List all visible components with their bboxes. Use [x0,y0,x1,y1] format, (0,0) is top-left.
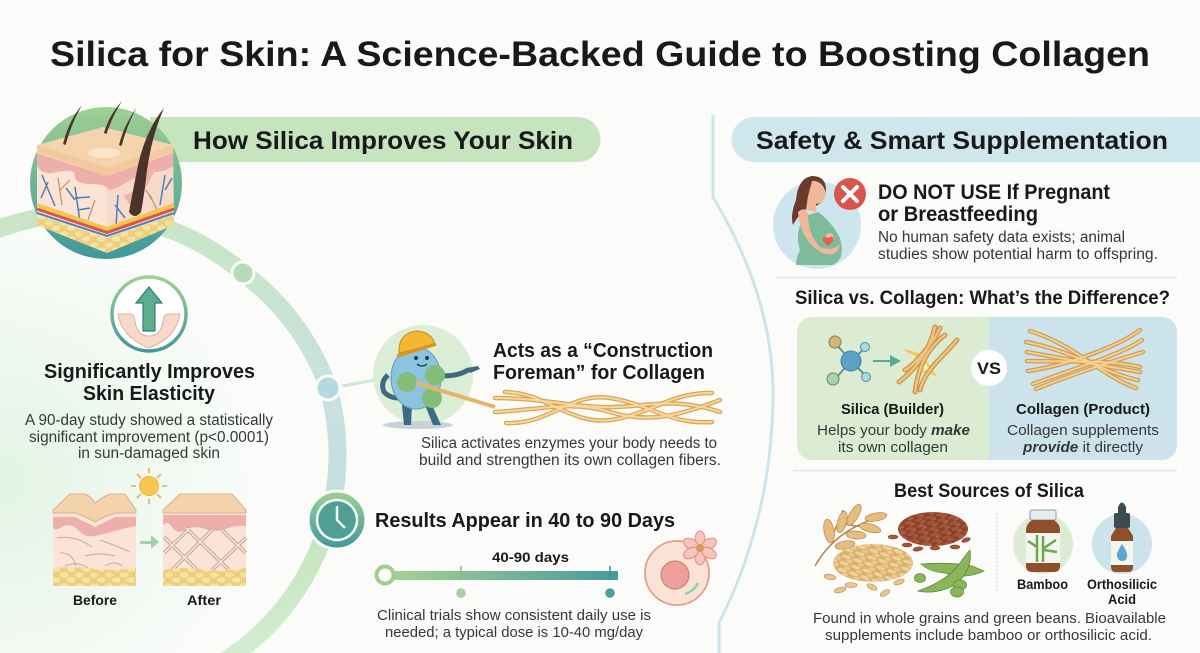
connector: node to foreman [342,380,375,386]
text: elasticity study: significant improvement (p<0.0001) [29,429,269,446]
illustration: before skin [53,494,136,586]
icon: pregnant woman warning [773,176,866,269]
heading: results timing: Results Appear in 40 to 90 Days [375,510,675,532]
text: pregnancy warning: No human safety data exists; animal [878,229,1125,246]
icon: collagen fibers [1026,330,1143,389]
text: pregnancy warning: studies show potential harm to offspring. [878,246,1158,263]
icon: clock [308,491,366,549]
timeline chart [376,549,618,598]
text: silica builder: its own collagen [838,439,948,456]
text: pregnancy warning [878,229,1158,263]
text: foreman description [419,435,721,469]
illustration: whole grains and beans [815,502,984,598]
text: collagen product [1007,401,1159,456]
illustration: after skin [163,494,246,586]
label: orthosilicic acid: Orthosilicic [1087,577,1157,592]
icon: red rice pile [888,512,971,552]
text: sources summary: supplements include bamboo or orthosilicic acid. [825,627,1152,644]
section ring arc [0,214,337,653]
heading: do not use [878,181,1110,226]
title: Silica for Skin: A Science-Backed Guide to Boosting Collagen [50,35,1150,74]
text: dosing: needed; a typical dose is 10-40 mg/day [385,624,643,641]
heading: silica vs collagen: Silica vs. Collagen: What’s the Difference? [795,287,1170,309]
label: after: After [187,592,222,608]
icon: skin cross-section [30,101,182,259]
icon: green beans [914,550,984,597]
icon: collagen being built [899,327,957,392]
icon: light rice pile [824,544,913,598]
badge: vs: VS [977,359,1001,378]
heading: do not use: or Breastfeeding [878,203,1038,226]
heading: skin elasticity: Significantly Improves [44,361,255,383]
arrow: silica to collagen [873,355,901,367]
arrow: before to after [140,535,159,549]
text: collagen product: Collagen (Product) [1016,401,1150,418]
text: silica builder: Helps your body make [817,422,970,439]
section heading: how silica improves your skin [150,117,601,162]
section heading: safety [732,117,1200,162]
text: elasticity study [25,412,273,462]
text: foreman description: Silica activates enzymes your body needs to [421,435,717,452]
text: collagen product: provide it directly [1022,439,1143,456]
text: silica builder [817,401,970,456]
text: silica builder: Silica (Builder) [841,401,944,418]
text: dosing [377,607,651,641]
node: ring dot upper [232,262,254,284]
label: before: Before [73,592,117,608]
badge: vs [971,350,1007,386]
section heading: how silica improves your skin: How Silica Improves Your Skin [193,127,573,155]
heading: construction foreman [493,340,713,384]
heading: construction foreman: Acts as a “Construction [493,340,713,362]
heading: best sources: Best Sources of Silica [894,481,1084,502]
text: elasticity study: A 90-day study showed a statistically [25,412,273,429]
dotted separator [996,513,998,592]
text: elasticity study: in sun-damaged skin [78,445,220,462]
heading: construction foreman: Foreman” for Collagen [493,362,705,384]
heading: skin elasticity: Skin Elasticity [83,383,216,405]
icon: elasticity arrow [112,277,186,351]
icon: wheat stalk [815,502,888,566]
timeline chart: 40-90 days [492,549,569,565]
label: bamboo: Bamboo [1017,577,1068,592]
icon: sun [131,468,167,504]
panel divider curve [713,115,773,653]
panel: comparison [797,317,1177,460]
heading: do not use: DO NOT USE If Pregnant [878,181,1110,204]
label: orthosilicic acid [1087,577,1157,607]
icon: skin cell with flower [645,531,718,605]
icon: silica foreman character [373,325,495,429]
label: orthosilicic acid: Acid [1108,592,1136,607]
text: dosing: Clinical trials show consistent daily use is [377,607,651,624]
text: foreman description: build and strengthen its own collagen fibers. [419,452,721,469]
icon: orthosilicic acid dropper [1092,502,1152,574]
section heading: safety: Safety & Smart Supplementation [756,127,1168,155]
text: collagen product: Collagen supplements [1007,422,1159,439]
node: ring dot blue [316,376,340,400]
icon: bamboo supplement bottle [1013,510,1073,574]
illustration: collagen braid [495,392,720,423]
heading: skin elasticity [44,361,255,405]
text: sources summary: Found in whole grains and green beans. Bioavailable [813,610,1166,627]
text: sources summary [813,610,1166,644]
icon: silica molecule [827,336,870,385]
